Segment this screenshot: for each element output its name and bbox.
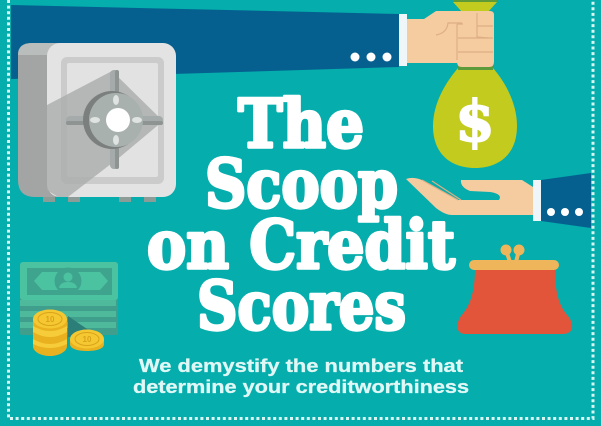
icon: red coin purse	[457, 244, 572, 334]
coins	[33, 310, 104, 356]
icon: money bag	[433, 0, 517, 168]
coins: 10	[46, 315, 55, 324]
title	[147, 85, 455, 345]
coins: 10	[83, 335, 92, 344]
subtitle	[133, 356, 469, 397]
dollar sign: $	[456, 89, 494, 155]
safe dial	[66, 70, 163, 169]
icon: cash and coins	[20, 262, 118, 356]
icon: safe	[18, 43, 176, 202]
subtitle: determine your creditworthiness	[133, 377, 469, 397]
title: The	[238, 85, 364, 163]
subtitle: We demystify the numbers that	[139, 356, 463, 376]
title: on Credit	[147, 206, 455, 284]
lower open hand	[406, 178, 533, 215]
title: Scores	[197, 267, 406, 345]
upper sleeve arm	[11, 5, 407, 79]
lower sleeve arm	[533, 173, 591, 228]
title: Scoop	[205, 145, 398, 223]
upper hand holding bag	[407, 11, 494, 67]
